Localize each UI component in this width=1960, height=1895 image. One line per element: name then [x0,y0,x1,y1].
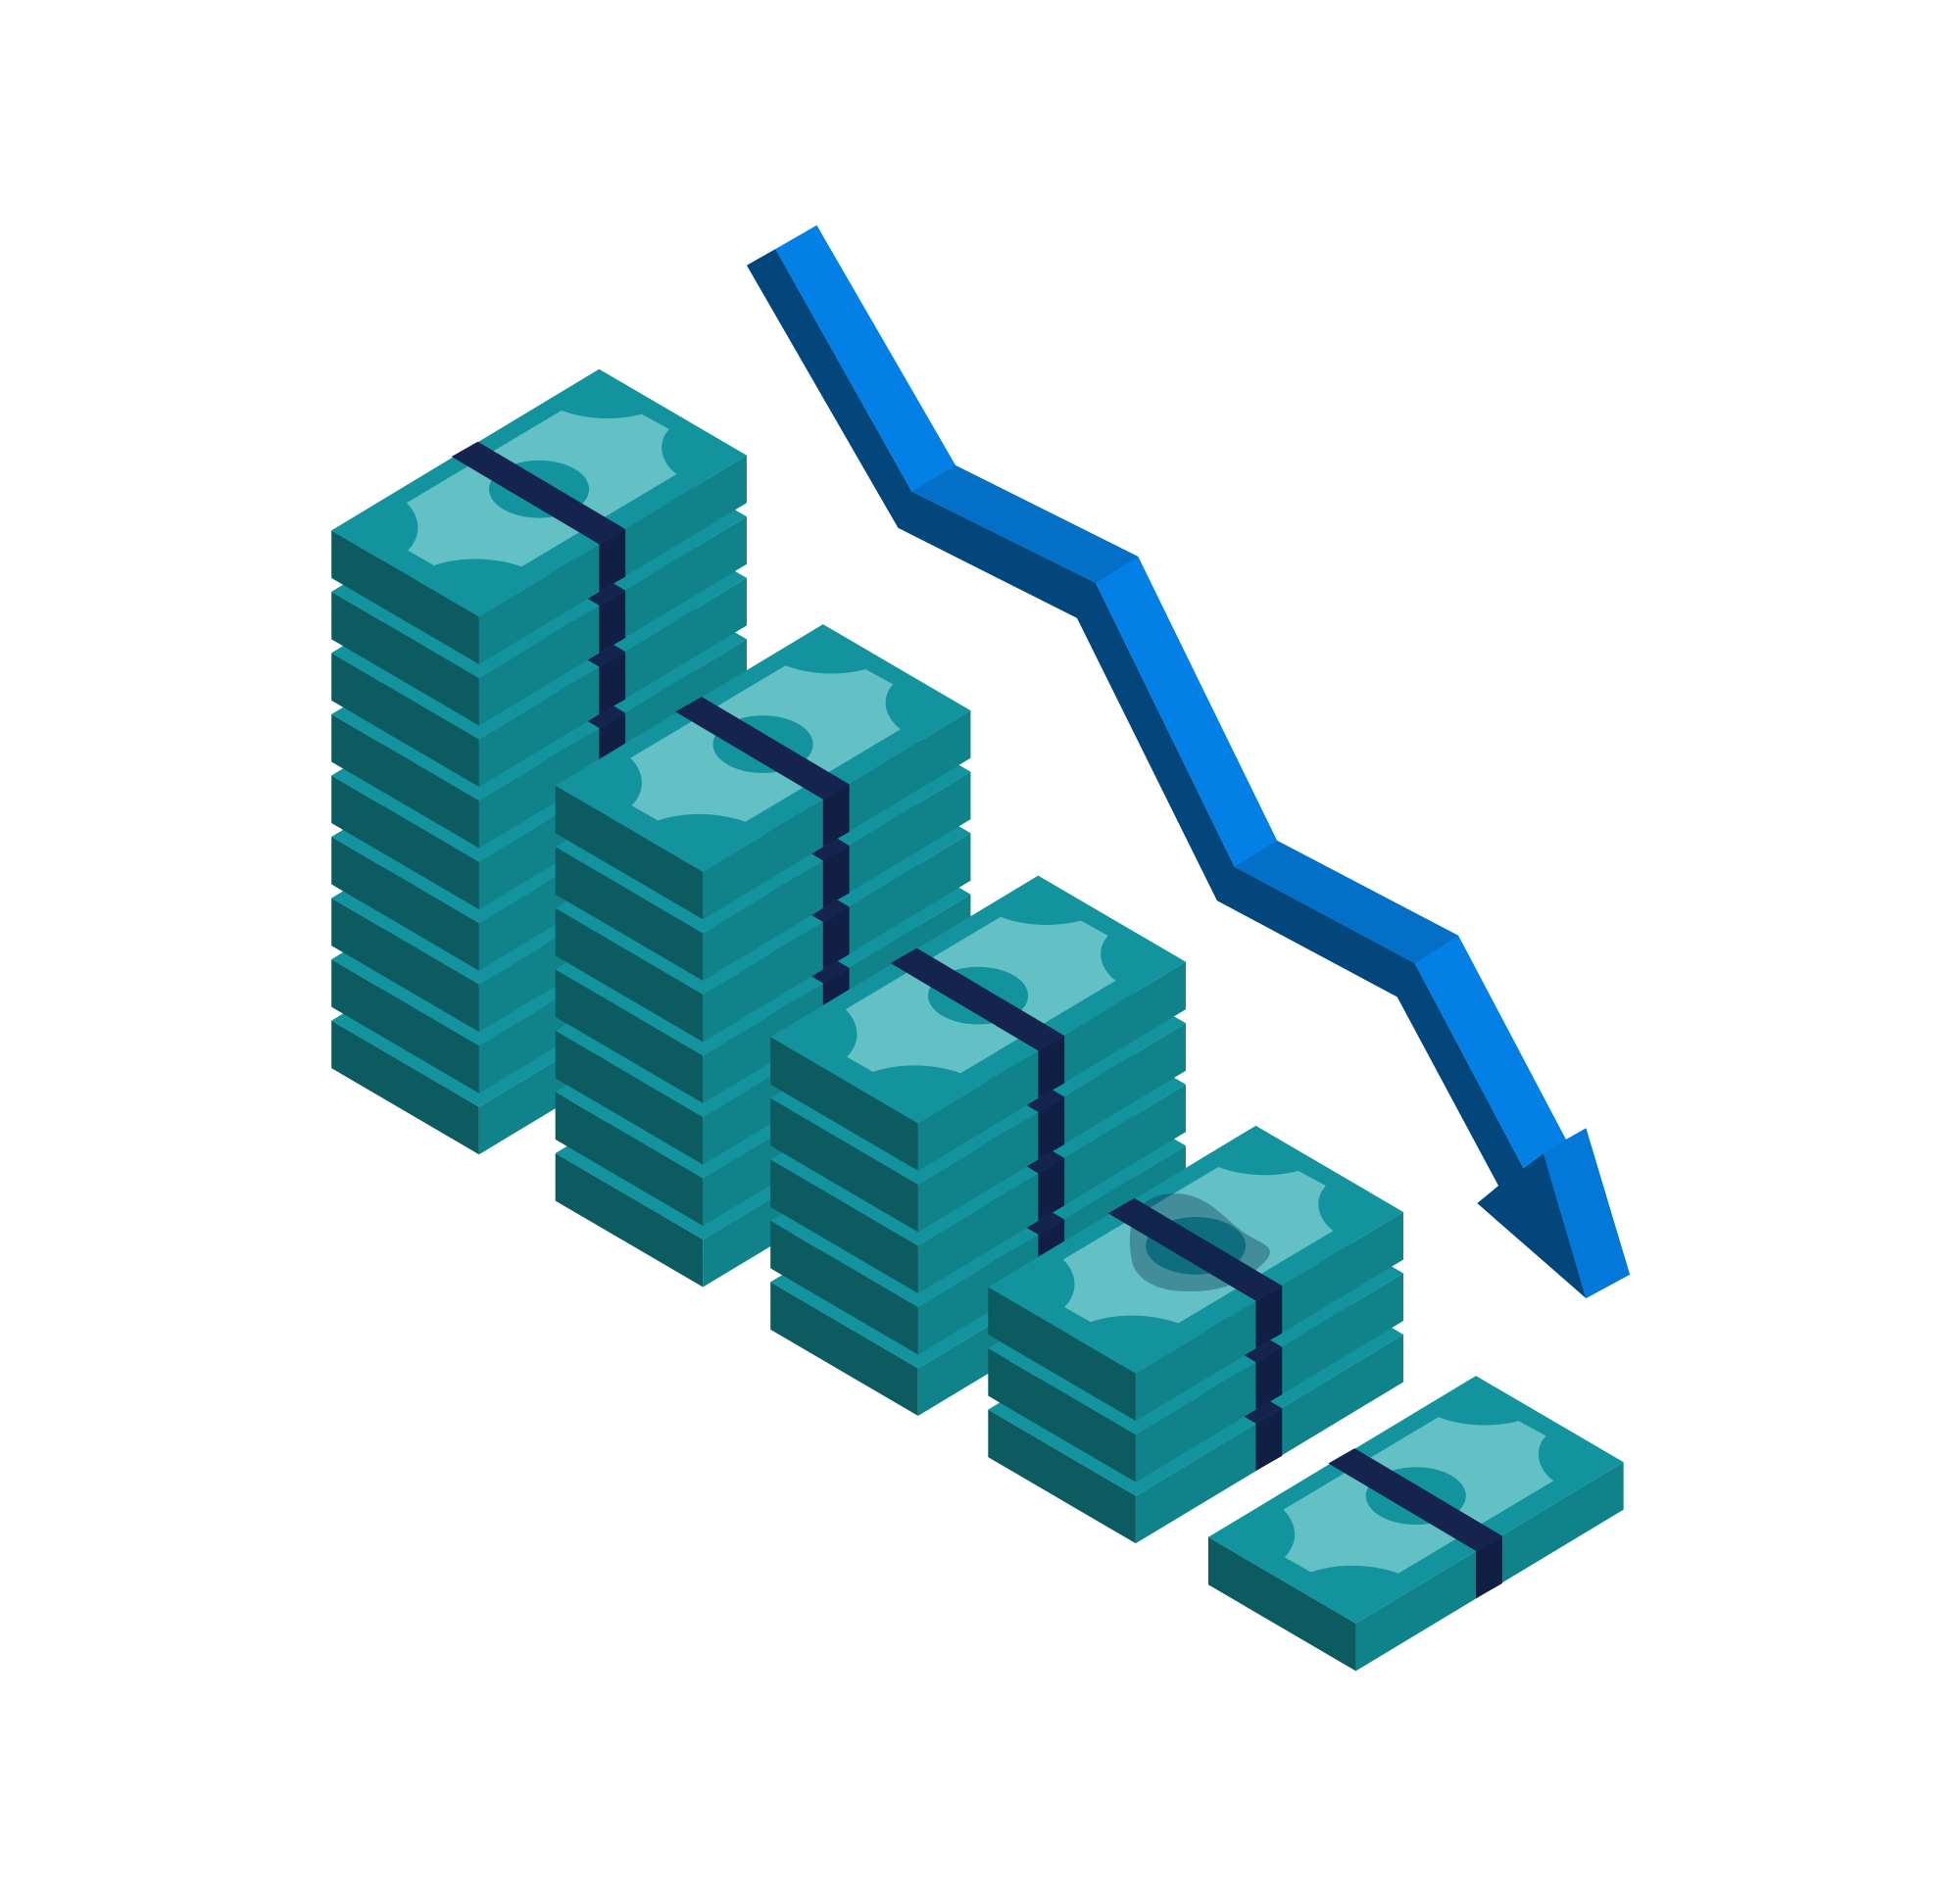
stack 2: seven layers [556,624,970,1288]
stack 4: three layers [988,1126,1403,1543]
stack 3: five layers [770,876,1186,1416]
arrow shadow on stack 4 [1130,1193,1270,1291]
arrow: downward trend [747,225,1630,1298]
stack 5: single bundle [1208,1376,1624,1671]
stack 1: nine layers [331,369,747,1154]
